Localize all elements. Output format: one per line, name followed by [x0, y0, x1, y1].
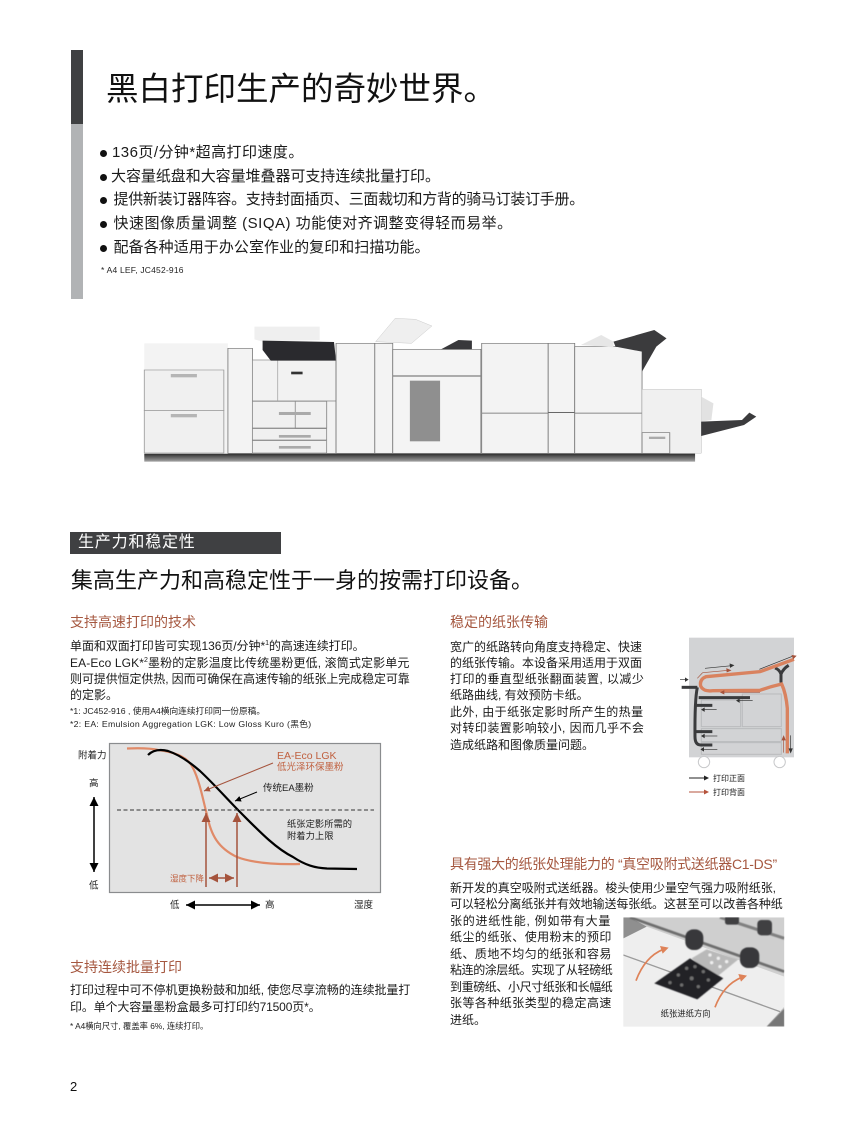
section heading: 集高生产力和高稳定性于一身的按需打印设备。 — [71, 568, 533, 593]
chart: adhesion vs temperature: 高 — [265, 899, 275, 911]
text: vacuum feeder: 到重磅纸、小尺寸纸张和长幅纸 — [450, 980, 612, 994]
accent bar — [71, 50, 83, 299]
text: high speed: EA-Eco LGK*2墨粉的定影温度比传统墨粉更低, 滚筒式定影单元 — [70, 656, 409, 670]
text: vacuum feeder: 进纸。 — [450, 1013, 486, 1027]
text: stable paper transport: 此外, 由于纸张定影时所产生的热量 — [450, 705, 643, 719]
text: continuous printing: 打印过程中可不停机更换粉鼓和加纸, 使您尽享流畅的连续批量打 — [70, 983, 410, 997]
text: vacuum feeder: 张等各种纸张类型的稳定高速 — [450, 996, 612, 1010]
heading: stable paper transport: 稳定的纸张传输 — [450, 614, 548, 630]
bullet 1: 136页/分钟*超高打印速度。 — [112, 144, 304, 161]
text: stable paper transport: 纸路曲线, 有效预防卡纸。 — [450, 688, 589, 702]
section label bar: 生产力和稳定性 — [78, 534, 196, 551]
chart: adhesion vs temperature: 低光泽环保墨粉 — [277, 761, 344, 773]
title: 黑白打印生产的奇妙世界。 — [106, 71, 496, 107]
page number: 2 — [70, 1079, 77, 1094]
chart: adhesion vs temperature: 纸张定影所需的 — [287, 818, 352, 829]
photo: vacuum feeder: 纸张进纸方向 — [661, 1009, 711, 1019]
text: vacuum feeder: 可以轻松分离纸张并有效地输送每张纸。这甚至可以改善各种纸 — [450, 897, 783, 911]
text: high speed: 的定影。 — [70, 688, 118, 702]
footnote: coverage: * A4横向尺寸, 覆盖率 6%, 连续打印。 — [70, 1021, 208, 1031]
bullet 3: 提供新装订器阵容。支持封面插页、三面裁切和方背的骑马订装订手册。 — [114, 191, 584, 208]
legend: paper path: 打印正面 — [713, 773, 745, 783]
footnote: speed: * A4 LEF, JC452-916 — [101, 265, 184, 275]
bullet 5: 配备各种适用于办公室作业的复印和扫描功能。 — [114, 239, 430, 256]
chart: adhesion vs temperature: 低 — [170, 899, 180, 911]
text: stable paper transport: 对转印装置影响较小, 因而几乎不会 — [450, 721, 644, 735]
text: stable paper transport: 的纸张传输。本设备采用适用于双面 — [450, 656, 642, 670]
heading: vacuum feeder: 具有强大的纸张处理能力的 “真空吸附式送纸器C1-DS” — [450, 856, 777, 872]
text: high speed: 则可提供恒定供热, 因而可确保在高速传输的纸张上完成稳定可靠 — [70, 672, 410, 686]
heading: continuous printing: 支持连续批量打印 — [70, 959, 182, 975]
chart: adhesion vs temperature: 传统EA墨粉 — [263, 782, 314, 794]
text: vacuum feeder — [450, 881, 783, 1027]
text: stable paper transport — [450, 640, 644, 752]
text: vacuum feeder: 纸尘的纸张、使用粉末的预印 — [450, 930, 612, 944]
text: vacuum feeder: 张的进纸性能, 例如带有大量 — [450, 914, 611, 928]
text: high speed: 单面和双面打印皆可实现136页/分钟*1的高速连续打印。 — [70, 639, 365, 653]
bullet 2: 大容量纸盘和大容量堆叠器可支持连续批量打印。 — [111, 168, 440, 185]
chart: adhesion vs temperature: 低 — [89, 880, 99, 892]
chart: adhesion vs temperature: 高 — [89, 778, 99, 790]
text: continuous printing — [70, 983, 410, 1014]
chart: adhesion vs temperature: 附着力 — [78, 750, 107, 762]
text: vacuum feeder: 纸、质地不均匀的纸张和容易 — [450, 947, 612, 961]
chart: adhesion vs temperature: 附着力上限 — [287, 830, 334, 841]
legend: paper path: 打印背面 — [713, 787, 745, 797]
feature list — [100, 144, 584, 256]
chart: adhesion vs temperature: 湿度 — [354, 899, 374, 911]
chart: adhesion vs temperature: EA-Eco LGK — [277, 750, 337, 762]
text: vacuum feeder: 粘连的涂层纸。实现了从轻磅纸 — [450, 963, 612, 977]
footnote 2: *2: EA: Emulsion Aggregation LGK: Low Gloss Kuro (黑色) — [70, 719, 311, 729]
text: stable paper transport: 打印的垂直型纸张翻面装置, 以减少 — [450, 672, 644, 686]
text: stable paper transport: 造成纸路和图像质量问题。 — [450, 738, 594, 752]
text: continuous printing: 印。单个大容量墨粉盒最多可打印约71500页*。 — [70, 1000, 320, 1014]
text: vacuum feeder: 新开发的真空吸附式送纸器。梭头使用少量空气强力吸附纸张, — [450, 881, 776, 895]
text: stable paper transport: 宽广的纸路转向角度支持稳定、快速 — [450, 640, 642, 654]
photo: vacuum feeder — [623, 917, 784, 1027]
text: high speed — [70, 639, 410, 702]
section label bar — [70, 532, 281, 554]
footnote 1: *1: JC452-916 , 使用A4横向连续打印同一份原稿。 — [70, 706, 265, 716]
bullet 4: 快速图像质量调整 (SIQA) 功能使对齐调整变得轻而易举。 — [114, 215, 513, 232]
chart: adhesion vs temperature: 湿度下降 — [170, 874, 205, 884]
heading: high speed: 支持高速打印的技术 — [70, 614, 196, 630]
